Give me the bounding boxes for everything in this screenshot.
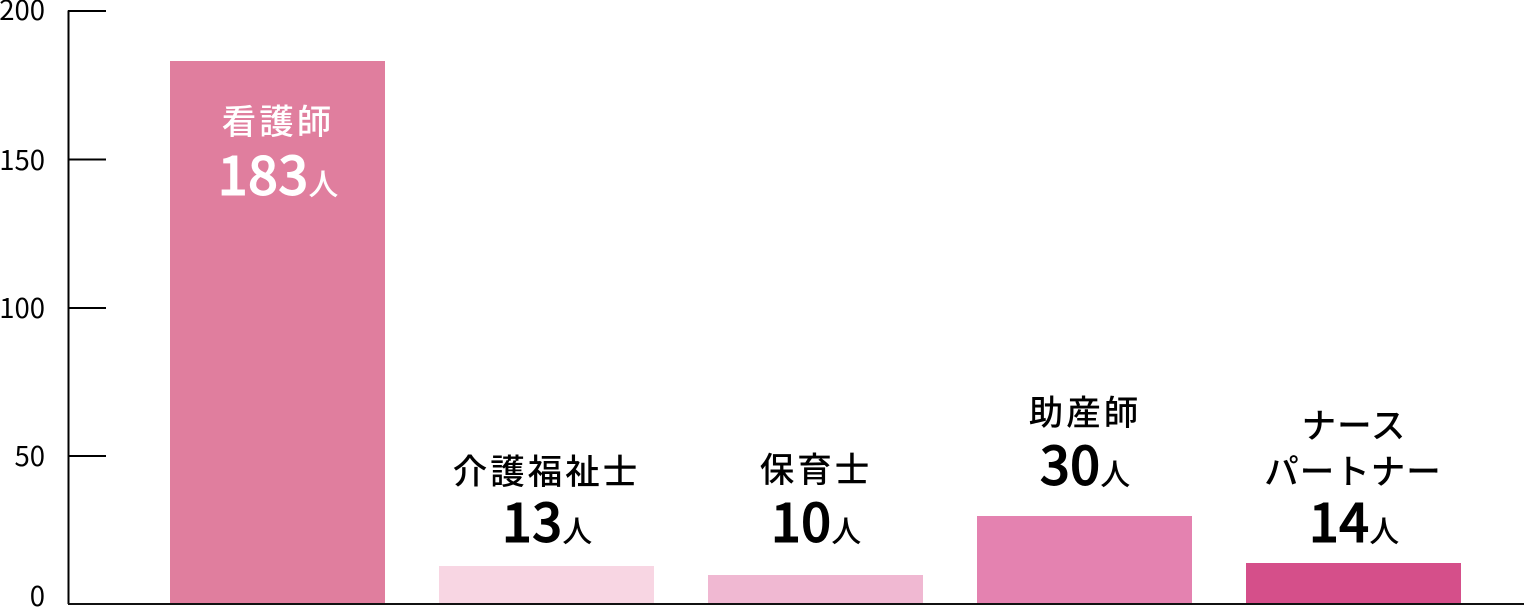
label: ナースパートナー 14人 bbox=[1264, 398, 1442, 558]
label: 介護福祉士 13人 bbox=[453, 444, 640, 558]
bar: ナースパートナー bbox=[1246, 563, 1461, 604]
label: ナースパートナー 14人: ナース bbox=[1302, 398, 1406, 448]
label: 保育士 10人: 10人 bbox=[771, 482, 861, 558]
label: 助産師 30人: 助産師 bbox=[1029, 385, 1141, 435]
baseline bbox=[68, 603, 1524, 605]
label: 介護福祉士 13人: 介護福祉士 bbox=[453, 444, 640, 494]
label: ナースパートナー 14人: パートナー bbox=[1264, 444, 1442, 494]
label: 保育士 10人 bbox=[760, 442, 872, 558]
y axis labels bbox=[0, 0, 45, 607]
label: 保育士 10人: 保育士 bbox=[760, 442, 872, 492]
label: 助産師 30人: 30人 bbox=[1040, 425, 1130, 501]
y axis labels: 100 bbox=[0, 286, 45, 326]
y axis bbox=[68, 10, 106, 604]
label: 看護師 183人: 183人 bbox=[218, 135, 338, 211]
bar: 保育士 bbox=[708, 575, 923, 604]
label: 看護師 183人 bbox=[218, 94, 338, 211]
label: ナースパートナー 14人: 14人 bbox=[1309, 482, 1399, 558]
y axis labels: 150 bbox=[0, 138, 45, 178]
label: 助産師 30人 bbox=[1029, 385, 1141, 501]
bar: 介護福祉士 bbox=[439, 566, 654, 604]
bar: 助産師 bbox=[977, 516, 1192, 604]
label: 看護師 183人: 看護師 bbox=[222, 94, 334, 144]
y axis labels: 50 bbox=[14, 434, 45, 474]
label: 介護福祉士 13人: 13人 bbox=[502, 482, 592, 558]
bar: 看護師 bbox=[170, 61, 385, 604]
